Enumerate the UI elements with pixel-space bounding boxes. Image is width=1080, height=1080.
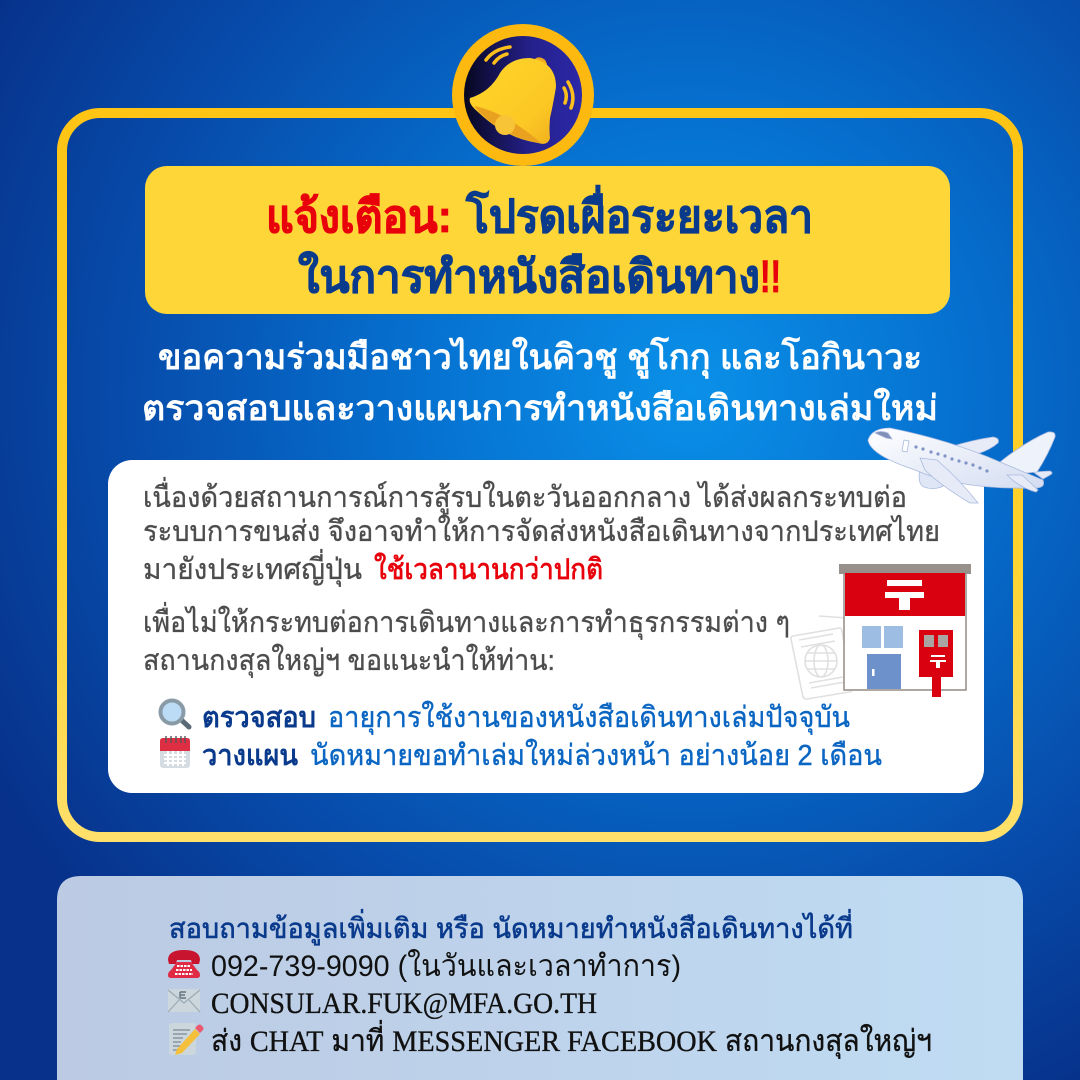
advice list: วางแผน xyxy=(202,740,298,772)
body paragraph 2 xyxy=(143,602,790,678)
banner xyxy=(145,166,950,314)
icon: memo and pencil xyxy=(169,1023,204,1055)
panel: notice xyxy=(108,460,984,793)
icon: passport xyxy=(791,616,863,699)
icon: telephone xyxy=(168,950,200,978)
subtitle: ขอความร่วมมือชาวไทยในคิวชู ชูโกกุ และโอกินาวะ xyxy=(158,336,922,379)
icon: calendar xyxy=(160,736,190,768)
advice list: นัดหมายขอทำเล่มใหม่ล่วงหน้า อย่างน้อย 2 เดือน xyxy=(310,738,882,772)
body paragraph 1: มายังประเทศญี่ปุ่น xyxy=(143,549,362,587)
banner line 1 xyxy=(266,185,813,242)
subtitle xyxy=(142,336,938,428)
body paragraph 1: ใช้เวลานานกว่าปกติ xyxy=(374,552,603,586)
banner line 2: ในการทำหนังสือเดินทาง xyxy=(298,250,760,302)
body paragraph 1 xyxy=(143,477,940,587)
phone: 092-739-9090 (ในวันและเวลาทำการ) xyxy=(211,949,681,983)
icon: bell badge xyxy=(452,24,594,166)
advice list xyxy=(202,700,882,772)
body paragraph 2: เพื่อไม่ให้กระทบต่อการเดินทางและการทำธุรกรรมต่าง ๆ xyxy=(143,602,790,640)
main frame xyxy=(62,113,1018,837)
contact heading: สอบถามข้อมูลเพิ่มเติม หรือ นัดหมายทำหนังสือเดินทางได้ที่ xyxy=(169,909,853,946)
advice list: ตรวจสอบ xyxy=(202,702,316,734)
icon: envelope xyxy=(168,989,200,1012)
panel: contact xyxy=(57,876,1023,1080)
body paragraph 1: ระบบการขนส่ง จึงอาจทำให้การจัดส่งหนังสือเดินทางจากประเทศไทย xyxy=(143,514,940,548)
advice list: อายุการใช้งานของหนังสือเดินทางเล่มปัจจุบัน xyxy=(328,700,850,735)
subtitle: ตรวจสอบและวางแผนการทำหนังสือเดินทางเล่มใหม่ xyxy=(142,387,938,428)
banner line 2: !! xyxy=(760,251,781,302)
icon: post office xyxy=(839,564,971,697)
email: CONSULAR.FUK@MFA.GO.TH xyxy=(211,987,597,1020)
body paragraph 2: สถานกงสุลใหญ่ฯ ขอแนะนำให้ท่าน: xyxy=(143,643,555,678)
icon: magnifier xyxy=(160,700,189,727)
banner line 1: โปรดเผื่อระยะเวลา xyxy=(465,185,813,242)
body paragraph 1: เนื่องด้วยสถานการณ์การสู้รบในตะวันออกกลาง ได้ส่งผลกระทบต่อ xyxy=(143,477,907,515)
banner line 1: แจ้งเตือน: xyxy=(266,191,452,242)
icon: airplane xyxy=(868,428,1055,503)
chat: ส่ง CHAT มาที่ MESSENGER FACEBOOK สถานกงสุลใหญ่ฯ xyxy=(211,1020,932,1060)
